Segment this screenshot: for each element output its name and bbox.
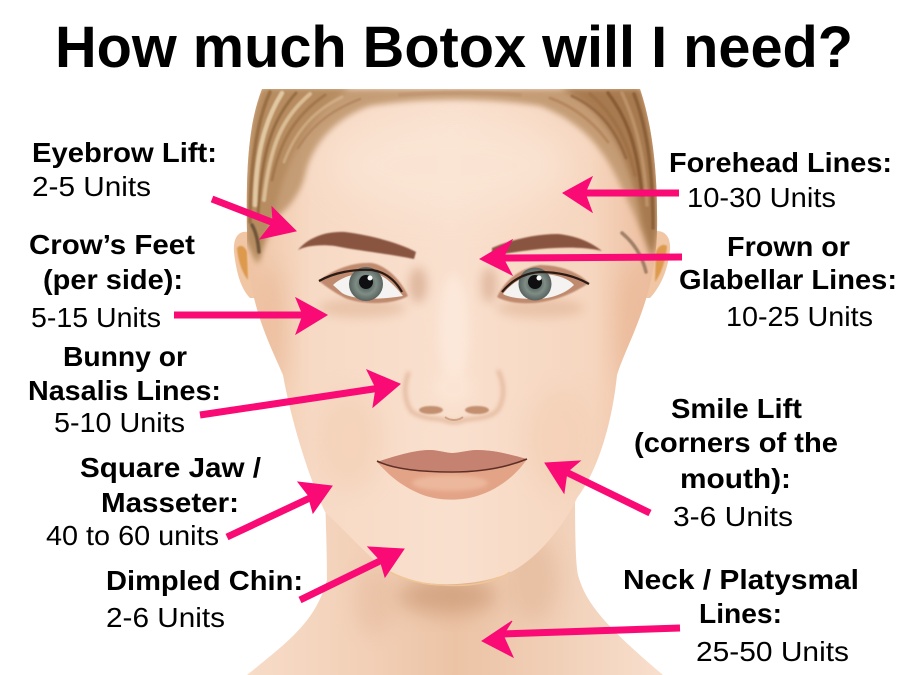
face photo bbox=[234, 89, 670, 675]
label: crow's feet: 5-15 Units bbox=[31, 302, 161, 333]
right ear bbox=[640, 231, 670, 298]
label: bunny or nasalis lines: 5-10 Units bbox=[54, 407, 185, 438]
label: smile lift: 3-6 Units bbox=[673, 501, 793, 532]
face skin bbox=[247, 89, 657, 584]
label: neck / platysmal lines: Neck / Platysmal bbox=[623, 564, 859, 595]
label: eyebrow lift bbox=[32, 137, 217, 202]
label: neck / platysmal lines bbox=[623, 564, 859, 667]
arrow: smile lift bbox=[545, 461, 650, 513]
arrow: neck lines bbox=[482, 621, 680, 657]
forehead highlight bbox=[349, 135, 560, 194]
label: bunny or nasalis lines: Bunny or bbox=[63, 341, 187, 372]
label: crow's feet bbox=[29, 229, 195, 333]
arrow: forehead lines bbox=[563, 177, 679, 212]
arrow: bunny lines bbox=[200, 370, 400, 415]
label: dimpled chin: 2-6 Units bbox=[106, 602, 225, 633]
label: bunny or nasalis lines bbox=[28, 341, 221, 438]
label: smile lift: mouth): bbox=[680, 463, 791, 494]
neck bbox=[247, 490, 663, 675]
left eyebrow bbox=[298, 232, 416, 259]
arrow: eyebrow lift bbox=[212, 199, 296, 239]
label: neck / platysmal lines: 25-50 Units bbox=[696, 636, 849, 667]
label: frown or glabellar lines: 10-25 Units bbox=[726, 301, 873, 332]
label: dimpled chin bbox=[106, 565, 303, 633]
eye socket shading bbox=[318, 267, 584, 318]
right eye bbox=[497, 265, 589, 303]
label: forehead lines: 10-30 Units bbox=[687, 182, 836, 213]
left eye bbox=[319, 263, 408, 303]
left ear bbox=[234, 232, 262, 298]
jawline edge bbox=[390, 572, 510, 585]
label: square jaw / masseter: Square Jaw / bbox=[80, 452, 261, 483]
label: frown or glabellar lines: Frown or bbox=[727, 231, 850, 262]
hair strands bbox=[250, 92, 653, 272]
arrow: crow's feet bbox=[174, 298, 327, 334]
label: eyebrow lift: Eyebrow Lift: bbox=[32, 137, 217, 168]
label: eyebrow lift: 2-5 Units bbox=[32, 171, 151, 202]
label: smile lift: (corners of the bbox=[634, 427, 838, 458]
label: smile lift bbox=[634, 393, 838, 532]
label: forehead lines: Forehead Lines: bbox=[669, 147, 892, 178]
right eyebrow bbox=[492, 234, 602, 257]
arrow: square jaw bbox=[227, 482, 332, 537]
label: smile lift: Smile Lift bbox=[671, 393, 802, 424]
hair bbox=[247, 89, 657, 272]
label: neck / platysmal lines: Lines: bbox=[699, 598, 782, 629]
lips bbox=[377, 450, 527, 500]
label: crow's feet: (per side): bbox=[43, 264, 183, 295]
arrow: dimpled chin bbox=[300, 547, 404, 600]
neck shadow bbox=[397, 578, 497, 614]
arrow: frown lines bbox=[480, 240, 682, 275]
title: How much Botox will I need? bbox=[55, 15, 853, 80]
label: frown or glabellar lines: Glabellar Lines: bbox=[679, 264, 897, 295]
label: square jaw / masseter: Masseter: bbox=[101, 487, 239, 518]
nose bbox=[405, 275, 503, 422]
label: square jaw / masseter: 40 to 60 units bbox=[46, 520, 219, 551]
label: forehead lines bbox=[669, 147, 892, 213]
cheek shading bbox=[260, 274, 289, 371]
label: square jaw / masseter bbox=[46, 452, 261, 551]
label: frown or glabellar lines bbox=[679, 231, 897, 332]
label: bunny or nasalis lines: Nasalis Lines: bbox=[28, 375, 221, 406]
label: crow's feet: Crow’s Feet bbox=[29, 229, 195, 260]
label: dimpled chin: Dimpled Chin: bbox=[106, 565, 303, 596]
